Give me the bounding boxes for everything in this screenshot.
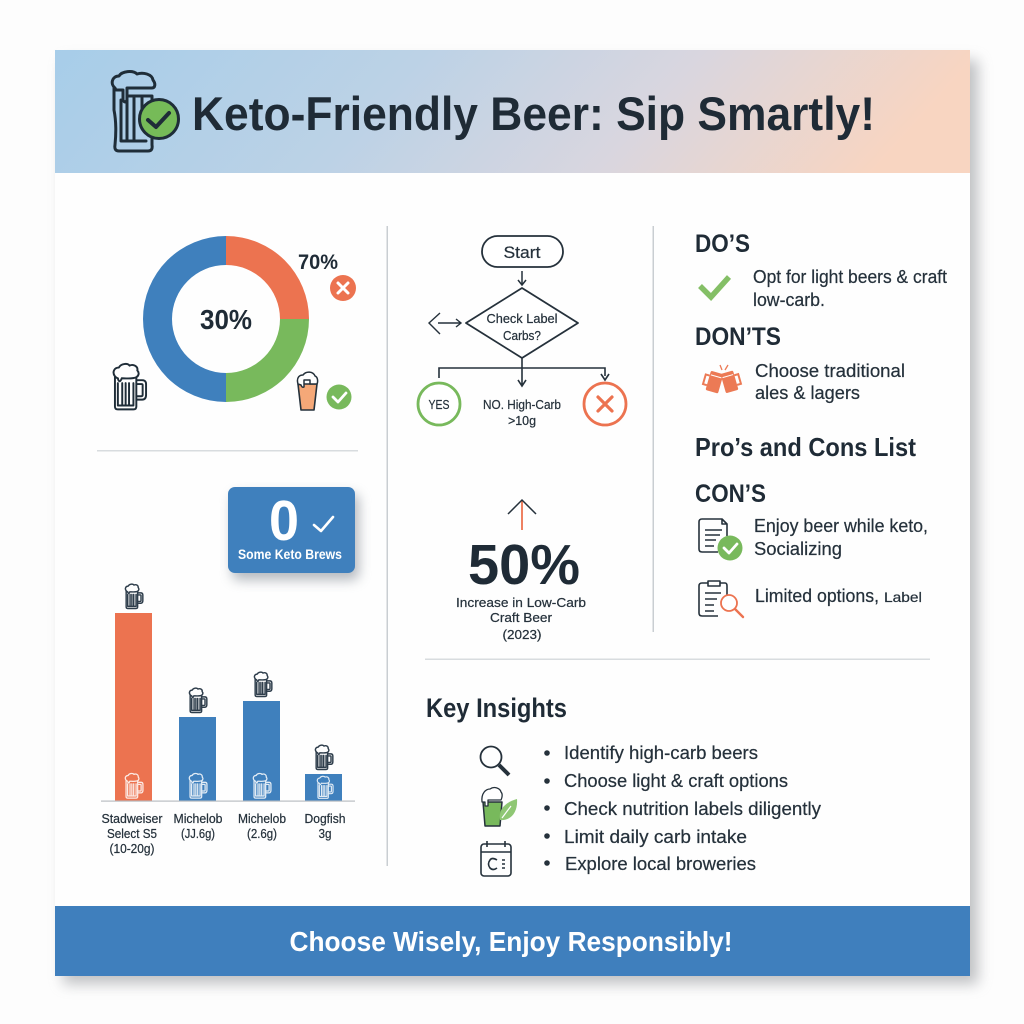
- start node: Start: [504, 243, 541, 262]
- icons inside bars: [125, 773, 333, 798]
- panel: pros and cons: [695, 432, 928, 617]
- list: insights: Explore local broweries: [565, 853, 756, 874]
- list: insights: Choose light & craft options: [564, 770, 788, 791]
- list: insights: Identify high-carb beers: [564, 742, 758, 763]
- icon: green check: [700, 277, 729, 297]
- heading: do's: DO’S: [695, 230, 750, 258]
- list: insights: [544, 742, 822, 874]
- arrow to decision: [518, 271, 526, 285]
- column divider one: [386, 226, 388, 866]
- stat: 50% increase: 50%: [468, 533, 580, 597]
- decision node: Check Label: [486, 311, 558, 326]
- text: con item one: Enjoy beer while keto,: [754, 515, 928, 536]
- text: don't item: [755, 360, 905, 403]
- stat: 50% increase: (2023): [502, 627, 542, 642]
- text: do item: low-carb.: [753, 289, 825, 310]
- icon: green beer with leaf: [482, 788, 517, 826]
- branch connectors: [439, 358, 609, 386]
- bar: Dogfish: [305, 774, 342, 801]
- icon: up arrow: [508, 500, 536, 530]
- icon: calendar: [481, 841, 511, 876]
- icon: x badge: [330, 275, 356, 301]
- decision node: [466, 288, 578, 358]
- bar: Michelob two: [243, 701, 280, 801]
- text: don't item: Choose traditional: [755, 360, 905, 381]
- bar labels: Dogfish: [304, 812, 346, 826]
- text: con item two: Label: [884, 589, 922, 605]
- bar labels: (JJ.6g): [181, 827, 215, 841]
- footer banner: [55, 906, 970, 976]
- left divider: [97, 450, 358, 452]
- bar labels: Select S5: [107, 827, 157, 841]
- bar: Stadweiser: [115, 613, 152, 801]
- text: do item: Opt for light beers & craft: [753, 266, 947, 287]
- panel: key insights: [426, 693, 822, 876]
- stat card: keto brews: 0: [269, 489, 299, 553]
- bar labels: Michelob: [174, 812, 223, 826]
- panel: do's and don'ts: [695, 230, 947, 403]
- heading: con's: CON’S: [695, 480, 766, 508]
- bar labels: Michelob: [238, 812, 286, 826]
- stat: 50% increase: Increase in Low-Carb: [456, 595, 586, 610]
- icon: magnifier: [480, 746, 509, 775]
- text: con item one: [754, 515, 928, 559]
- footer banner: Choose Wisely, Enjoy Responsibly!: [290, 926, 732, 957]
- icon: clipboard with magnifier: [699, 581, 743, 617]
- bar: Michelob one: [179, 717, 216, 801]
- title: Keto-Friendly Beer: Sip Smartly!: [192, 87, 875, 140]
- stat: 50% increase: Craft Beer: [490, 610, 553, 625]
- bar labels: [102, 812, 346, 856]
- header banner: [55, 50, 970, 173]
- text: con item one: Socializing: [754, 538, 842, 559]
- side arrow: [429, 313, 461, 334]
- no label: [483, 398, 561, 428]
- decision node: Carbs?: [503, 328, 541, 343]
- axis: [101, 800, 355, 802]
- no label: NO. High-Carb: [483, 398, 561, 412]
- icon: pint with check: [297, 372, 352, 410]
- heading: pros and cons list: Pro’s and Cons List: [695, 432, 916, 462]
- stat card: keto brews: Some Keto Brews: [238, 547, 342, 562]
- flowchart: [418, 236, 626, 428]
- start node: [482, 236, 563, 267]
- icons above bars: [125, 584, 333, 769]
- heading: key insights: Key Insights: [426, 693, 567, 723]
- donut chart: [114, 236, 356, 410]
- text: do item: [753, 266, 947, 310]
- bar labels: (10-20g): [110, 842, 154, 856]
- text: con item two: Limited options,: [755, 585, 879, 606]
- stat: 50% increase: [456, 500, 586, 642]
- icon: beer mug: [114, 364, 146, 409]
- column divider two: [652, 226, 654, 632]
- bar labels: (2.6g): [247, 827, 277, 841]
- list: insights: Check nutrition labels diligently: [564, 798, 822, 819]
- text: don't item: ales & lagers: [755, 382, 860, 403]
- yes node: YES: [428, 397, 450, 412]
- donut center value: 30%: [200, 304, 252, 335]
- heading: don'ts: DON’TS: [695, 323, 781, 351]
- icon: clinking mugs: [702, 365, 742, 394]
- list: insights: Limit daily carb intake: [564, 826, 747, 847]
- yes node: [418, 383, 460, 425]
- 70% label: 70%: [298, 251, 338, 274]
- bar chart: [101, 584, 355, 856]
- bar labels: 3g: [318, 827, 332, 841]
- stat card: keto brews: [228, 487, 359, 580]
- bar labels: Stadweiser: [102, 812, 162, 826]
- x node: [584, 383, 626, 425]
- no label: >10g: [508, 414, 536, 428]
- icon: beer glass with check: [112, 72, 178, 151]
- insights divider: [425, 658, 930, 660]
- icon: document with check: [699, 519, 742, 560]
